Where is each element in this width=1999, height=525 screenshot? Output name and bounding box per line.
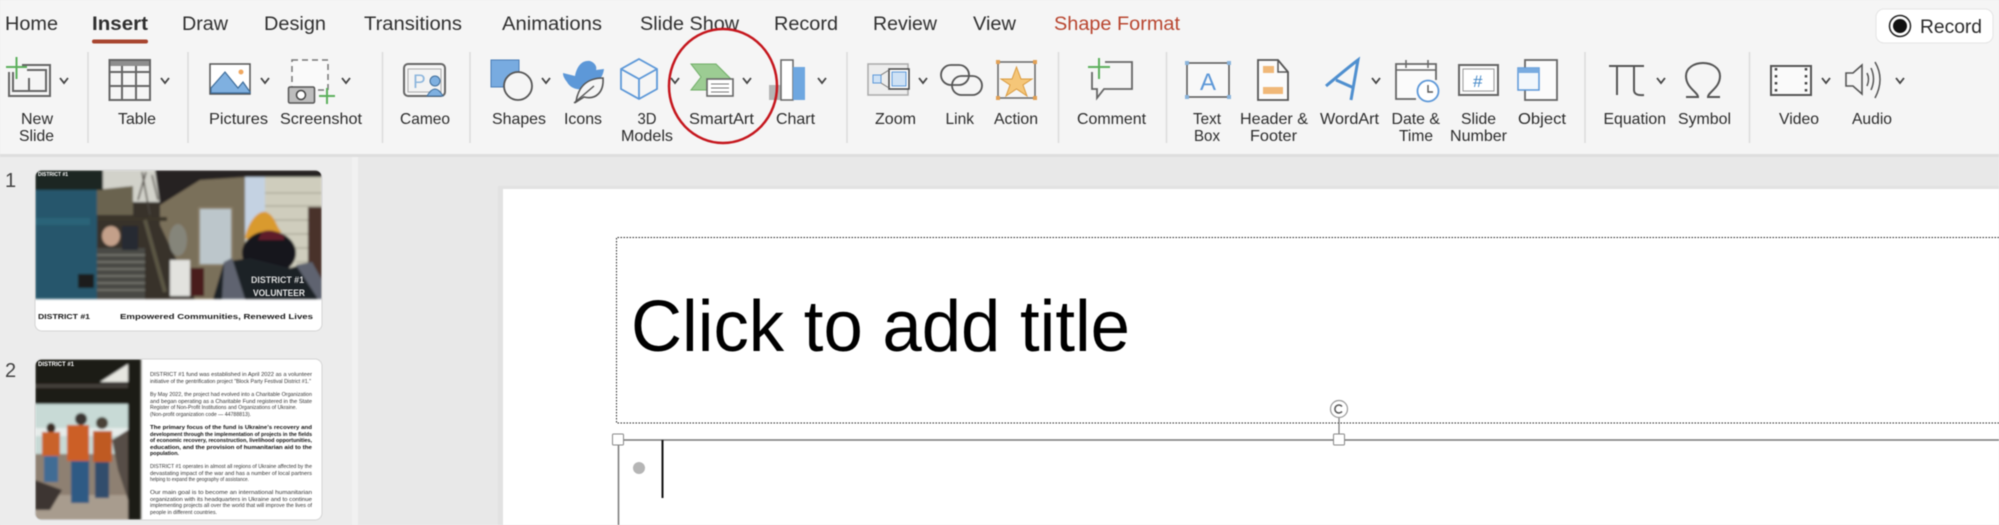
label: pictures: Pictures bbox=[209, 111, 268, 128]
icon: text box: A bbox=[1200, 69, 1216, 96]
thumbnail 1 caption: Empowered Communities, Renewed Lives bbox=[120, 312, 313, 321]
thumbnail 2 text column: development through the implementation of projects in the fields bbox=[150, 432, 312, 438]
thumbnail 2 text column: people in different countries. bbox=[150, 510, 217, 516]
label: comment: Comment bbox=[1077, 111, 1147, 128]
label: chart: Chart bbox=[776, 111, 816, 128]
thumbnail 2 text column: implementing projects all over the world that will improve the lives of bbox=[150, 503, 312, 509]
panel: ribbon bbox=[0, 0, 1999, 157]
selected content placeholder bbox=[612, 400, 1999, 525]
label: cameo: Cameo bbox=[400, 111, 450, 128]
label: slide number bbox=[1450, 111, 1508, 145]
icon: cameo: P bbox=[413, 72, 426, 93]
title placeholder box bbox=[616, 238, 1999, 423]
icon: video bbox=[1771, 66, 1830, 95]
bullet bbox=[633, 462, 645, 474]
icon: equation pi bbox=[1609, 66, 1665, 95]
icon: link bbox=[941, 65, 982, 95]
ribbon tabs: Review bbox=[873, 14, 937, 35]
label: date and time: Time bbox=[1399, 128, 1433, 145]
label: date and time bbox=[1392, 111, 1440, 145]
icon: wordart bbox=[1326, 60, 1380, 100]
label: shapes: Shapes bbox=[492, 111, 546, 128]
label: screenshot: Screenshot bbox=[280, 111, 363, 128]
icon: symbol omega bbox=[1686, 63, 1720, 97]
panel: slide thumbnails sidebar bbox=[0, 156, 358, 525]
thumbnail 2 text column: Register of Non-Profit Institutions and Organizations of Ukraine. bbox=[150, 405, 297, 411]
thumbnail 1 caption bbox=[38, 312, 313, 321]
icon: chart bbox=[769, 60, 826, 100]
label: header and footer bbox=[1240, 111, 1308, 145]
ribbon tabs: Draw bbox=[182, 14, 228, 35]
ribbon tabs: Animations bbox=[502, 14, 602, 35]
label: equation: Equation bbox=[1604, 111, 1666, 128]
icon: slide number: # bbox=[1473, 72, 1483, 91]
label: new slide bbox=[19, 111, 54, 145]
ribbon tabs: Shape Format bbox=[1054, 14, 1181, 35]
thumbnail 1 number: 1 bbox=[5, 170, 16, 192]
record button bbox=[1876, 9, 1993, 43]
label: action: Action bbox=[994, 111, 1038, 128]
thumbnail 2 text column: education, and the provision of humanitarian aid to the bbox=[150, 445, 312, 451]
icon: action bbox=[996, 60, 1037, 100]
thumbnail 2 text column: of economic recovery, reconstruction, livelihood opportunities, bbox=[150, 438, 312, 444]
label: new slide: Slide bbox=[19, 128, 54, 145]
icon: comment bbox=[1088, 58, 1132, 98]
label: zoom: Zoom bbox=[875, 111, 916, 128]
label: link: Link bbox=[946, 111, 975, 128]
label: 3d models bbox=[621, 111, 673, 145]
label: table: Table bbox=[118, 111, 156, 128]
thumbnail 2 text column: devastating impact of the war and has a number of local partners bbox=[150, 471, 312, 477]
vest lettering: DISTRICT #1 bbox=[251, 275, 304, 285]
label: object: Object bbox=[1518, 111, 1567, 128]
label: audio: Audio bbox=[1852, 111, 1892, 128]
icon: new slide bbox=[6, 57, 68, 96]
icon: table bbox=[109, 60, 169, 100]
thumbnail 2 logo: DISTRICT #1 bbox=[38, 362, 75, 368]
vest lettering: VOLUNTEER bbox=[253, 288, 305, 298]
label: 3d models: 3D bbox=[638, 111, 656, 128]
label: video: Video bbox=[1779, 111, 1819, 128]
icon: text box bbox=[1185, 61, 1231, 99]
vest lettering bbox=[251, 275, 305, 298]
label: smartart: SmartArt bbox=[689, 111, 755, 128]
label: icons: Icons bbox=[564, 111, 602, 128]
ribbon tabs: Home bbox=[5, 14, 58, 35]
label: text box: Box bbox=[1194, 128, 1220, 145]
icon: date and time bbox=[1396, 60, 1438, 102]
thumbnail 2 text column: (Non-profit organization code — 44788813). bbox=[150, 412, 251, 418]
ribbon tabs: Transitions bbox=[364, 14, 462, 35]
ribbon tabs: View bbox=[973, 14, 1016, 35]
thumbnail 2 text column: and began operating as a Charitable Fund registered in the State bbox=[150, 399, 312, 405]
thumbnail 2 text column: DISTRICT #1 operates in almost all regions of Ukraine affected by the bbox=[150, 464, 312, 470]
title placeholder text: Click to add title bbox=[631, 287, 1130, 367]
thumbnail 2 text column: The primary focus of the fund is Ukraine's recovery and bbox=[150, 425, 313, 431]
icon: pictures bbox=[210, 64, 269, 94]
label: wordart: WordArt bbox=[1320, 111, 1380, 128]
icon: object bbox=[1518, 60, 1557, 100]
thumbnail 1 logo: DISTRICT #1 bbox=[38, 172, 68, 178]
thumbnail 2 text column: organization with its headquarters in Ukraine and to continue bbox=[150, 497, 312, 503]
thumbnail 2 text column: Our main goal is to become an international humanitarian bbox=[150, 490, 312, 496]
label: text box bbox=[1193, 111, 1222, 145]
icon: zoom bbox=[868, 64, 927, 95]
thumbnail 2 text column: population. bbox=[150, 451, 179, 457]
ribbon tabs: Slide Show bbox=[640, 14, 739, 35]
thumbnail 2 text column: By May 2022, the project had evolved into a Charitable Organization bbox=[150, 392, 312, 398]
icon: shapes bbox=[491, 60, 550, 100]
label: slide number: Slide bbox=[1461, 111, 1496, 128]
thumbnail 1 caption: DISTRICT #1 bbox=[38, 312, 91, 321]
callout: red circle around smartart bbox=[669, 29, 777, 143]
label: header and footer: Footer bbox=[1250, 128, 1298, 145]
icon: cameo bbox=[404, 64, 445, 96]
thumbnail 2 number: 2 bbox=[5, 360, 16, 382]
icon: icons bbox=[563, 61, 604, 103]
icon: 3d models bbox=[621, 59, 679, 99]
label: header and footer: Header & bbox=[1240, 111, 1308, 128]
thumbnail 2: photo and text slide bbox=[35, 359, 322, 520]
label: 3d models: Models bbox=[621, 128, 673, 145]
thumbnail 2 text column: DISTRICT #1 fund was established in April 2022 as a volunteer bbox=[150, 372, 312, 378]
rotate handle bbox=[1330, 400, 1348, 418]
label: date and time: Date & bbox=[1392, 111, 1440, 128]
resize handles bbox=[612, 434, 1344, 445]
icon: slide number bbox=[1459, 65, 1498, 95]
label: slide number: Number bbox=[1450, 128, 1508, 145]
icon: header and footer bbox=[1258, 60, 1288, 100]
panel: slide canvas bbox=[498, 186, 1999, 525]
thumbnail 2 text column: helping to expand the geography of assistance. bbox=[150, 477, 249, 483]
label: new slide: New bbox=[21, 111, 53, 128]
ribbon tabs: Record bbox=[774, 14, 838, 35]
thumbnail 1: photo slide bbox=[35, 170, 322, 331]
label: text box: Text bbox=[1193, 111, 1222, 128]
thumbnail 2 text column: initiative of the gentrification project "Block Party Festival District #1." bbox=[150, 379, 311, 385]
ribbon tabs: Design bbox=[264, 14, 326, 35]
text cursor bbox=[662, 440, 664, 498]
thumbnail 2 text column bbox=[150, 372, 313, 516]
ribbon tabs bbox=[5, 14, 1181, 44]
icon: screenshot bbox=[288, 60, 350, 104]
icon: smartart bbox=[691, 64, 751, 96]
icon: audio bbox=[1846, 62, 1904, 98]
label: symbol: Symbol bbox=[1678, 111, 1731, 128]
ribbon tabs: Insert bbox=[92, 14, 149, 35]
record button: Record bbox=[1920, 17, 1982, 38]
